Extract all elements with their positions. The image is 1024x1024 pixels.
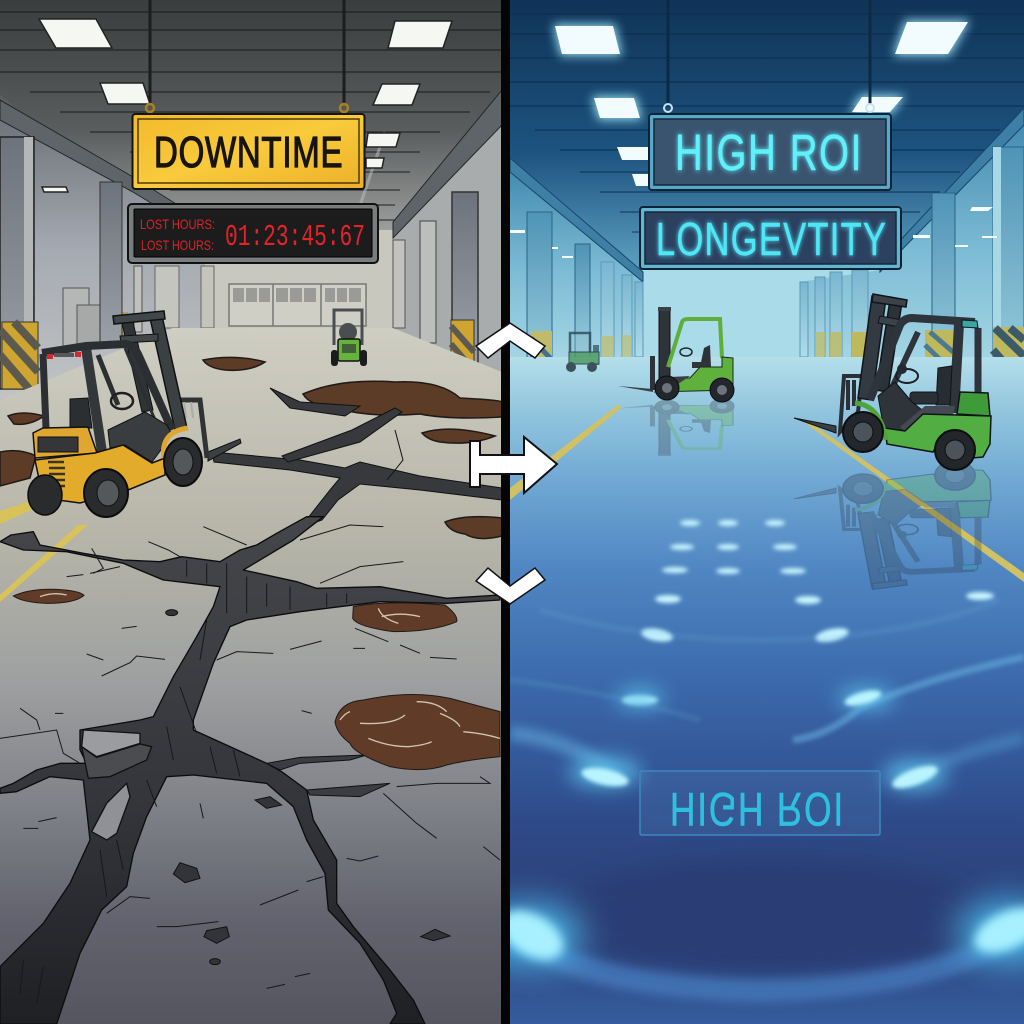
broken slab	[82, 730, 140, 757]
left wall	[0, 100, 214, 400]
upper oil puddles	[0, 357, 502, 539]
side branch	[307, 783, 390, 797]
tail lights	[47, 352, 81, 359]
forks	[208, 439, 241, 461]
ceiling: right warehouse	[510, 0, 1024, 280]
seat	[70, 398, 92, 428]
sign text: high roi: HIGH ROI	[675, 124, 863, 181]
light fragment	[92, 783, 130, 840]
body	[35, 445, 165, 503]
ceiling lights: right	[510, 20, 997, 258]
upper cracks	[212, 388, 502, 528]
center divider	[501, 0, 510, 1024]
left panel: cracked warehouse	[0, 0, 502, 1024]
dashboard	[108, 412, 172, 462]
main crack network	[0, 517, 500, 1024]
sign: high roi	[649, 114, 891, 190]
operator cage	[43, 354, 46, 428]
hairline cracks	[0, 525, 500, 988]
arrow: double-headed comparison	[470, 437, 557, 493]
left wall: right panel	[510, 158, 644, 357]
floor: cracked concrete	[0, 328, 502, 1024]
sign text: downtime: DOWNTIME	[154, 129, 343, 177]
forklift: large green	[794, 294, 991, 470]
right panel: polished floor	[478, 0, 1024, 1024]
timer labels: LOST HOURS:	[140, 216, 215, 232]
floor reflections of forklifts	[618, 399, 991, 589]
right wall: right panel	[800, 108, 1024, 395]
puddle highlights	[40, 594, 500, 747]
lower oil puddles	[13, 589, 500, 770]
back wall haze	[640, 270, 880, 360]
right wall	[393, 90, 502, 372]
yellow lane lines: right	[510, 405, 1024, 582]
carriage	[180, 400, 207, 458]
wheels	[28, 438, 202, 517]
timer labels	[140, 216, 215, 253]
forklift: small distant green	[331, 310, 367, 366]
hanging cables	[146, 0, 348, 112]
forklift: small distant green	[566, 333, 599, 372]
mirrored sign reflection	[640, 771, 880, 836]
front fender	[164, 428, 188, 458]
forklift: yellow	[28, 311, 241, 517]
sign: longevity	[640, 207, 901, 269]
waves and glows	[478, 600, 1024, 990]
mast	[122, 322, 153, 412]
timer labels: LOST HOURS:	[141, 237, 214, 253]
panel: lost hours timer	[128, 204, 378, 263]
floor light reflections	[622, 520, 994, 705]
forklift: middle green	[618, 307, 734, 402]
ceiling lights: left	[39, 19, 452, 192]
arrow: down chevron	[476, 568, 545, 604]
mirrored sign reflection: HIGH ROI	[670, 783, 845, 836]
steering wheel	[111, 393, 133, 409]
hanging cables: right	[664, 0, 874, 112]
yellow lane lines	[0, 500, 88, 602]
crack shading strokes	[20, 560, 347, 1003]
floor: reflective surface	[510, 357, 1024, 1024]
sign text: longevtity: LONGEVTITY	[656, 213, 887, 265]
sign: downtime	[132, 114, 364, 189]
floor debris	[166, 610, 450, 965]
timer digits: 01:23:45:67	[225, 220, 365, 255]
back wall with dock doors	[205, 230, 393, 328]
ceiling: left warehouse	[0, 0, 502, 236]
rear block	[33, 427, 97, 458]
chasm	[0, 517, 500, 1024]
arrow: up chevron	[476, 323, 545, 358]
